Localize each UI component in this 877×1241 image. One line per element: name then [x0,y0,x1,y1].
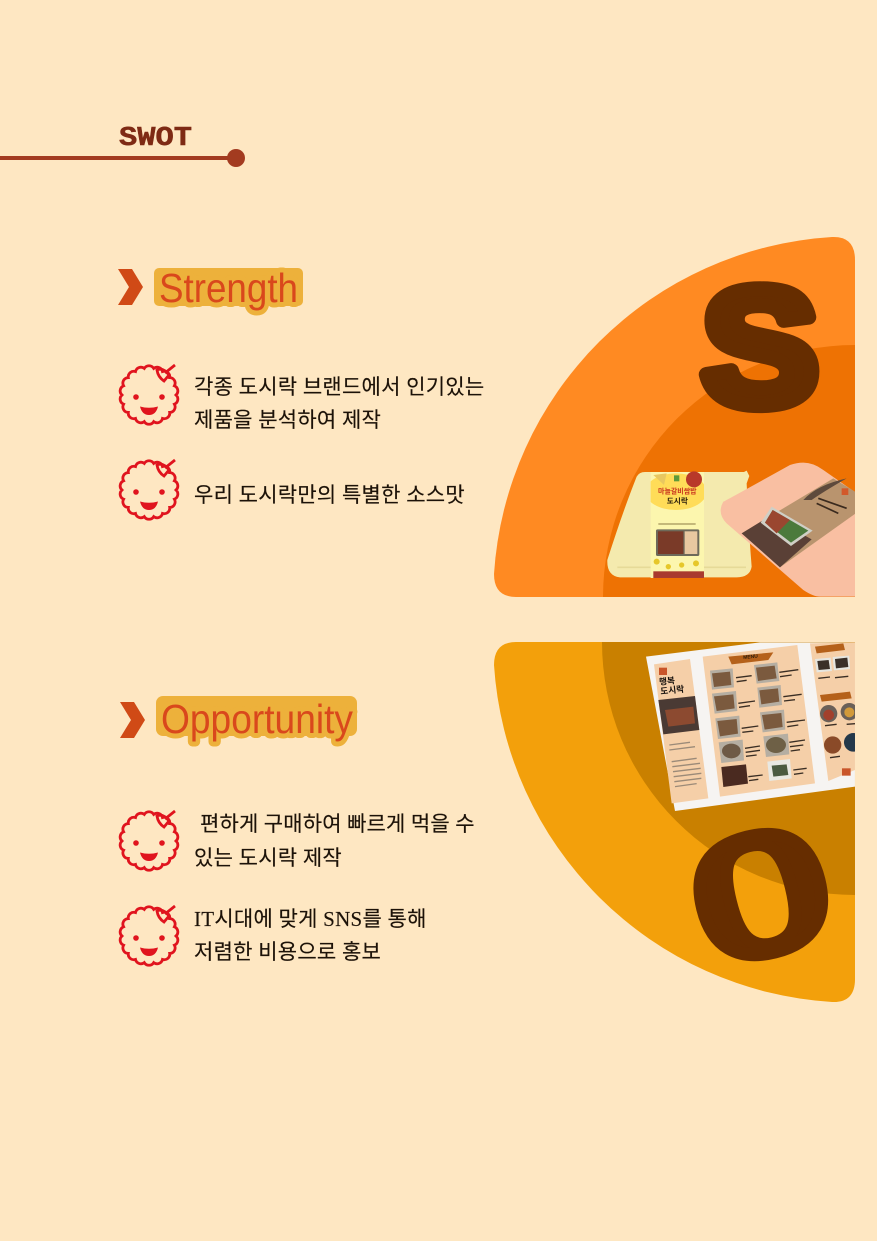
icon: smiling cookie 3 [120,811,178,870]
title rule with dot [0,149,245,167]
arrow: strength [118,269,143,305]
text: opportunity point 2: 저렴한 비용으로 홍보 [194,940,381,964]
icon: smiling cookie 4 [120,906,178,965]
letter O: O [671,782,851,1005]
icon: smiling cookie 1 [120,365,178,424]
text: strength point 1: 각종 도시락 브랜드에서 인기있는 [194,375,484,399]
icon: smiling cookie 2 [120,460,178,519]
panel: opportunity quarter circle [494,642,855,1002]
title: SWOT: SWOT [119,124,192,154]
photo: yellow lunch box [607,471,752,578]
photo: menu brochure: 도시락 [660,683,685,697]
text: opportunity point 1 continued: 있는 도시락 제작 [194,846,342,870]
letter S: S [702,256,818,440]
heading: Opportunity: Opportunity [161,696,353,742]
text: opportunity point 2: IT시대에 맞게 SNS를 통해 [194,907,427,931]
photo: yellow lunch box: 마늘갈비쌈밥 [658,486,697,496]
panel: strength quarter circle [494,237,855,597]
photo: menu brochure: MENU [743,653,759,661]
photo: yellow lunch box: 도시락 [667,495,688,506]
photo: pink lunch box [721,463,857,597]
text: strength point 1: 제품을 분석하여 제작 [194,408,381,432]
text: opportunity point 1: 편하게 구매하여 빠르게 먹을 수 [200,812,475,836]
photo: menu brochure [646,642,863,811]
heading: Strength: Strength [159,265,298,311]
text: strength point 1 [194,375,484,432]
text: strength point 2: 우리 도시락만의 특별한 소스맛 [194,483,465,507]
heading: Opportunity: Opportunity [161,696,353,742]
photo: menu brochure: 행복 [658,674,676,688]
arrow: opportunity [120,702,145,738]
text: opportunity point 2 [194,907,427,964]
heading: Strength: Strength [159,265,298,311]
